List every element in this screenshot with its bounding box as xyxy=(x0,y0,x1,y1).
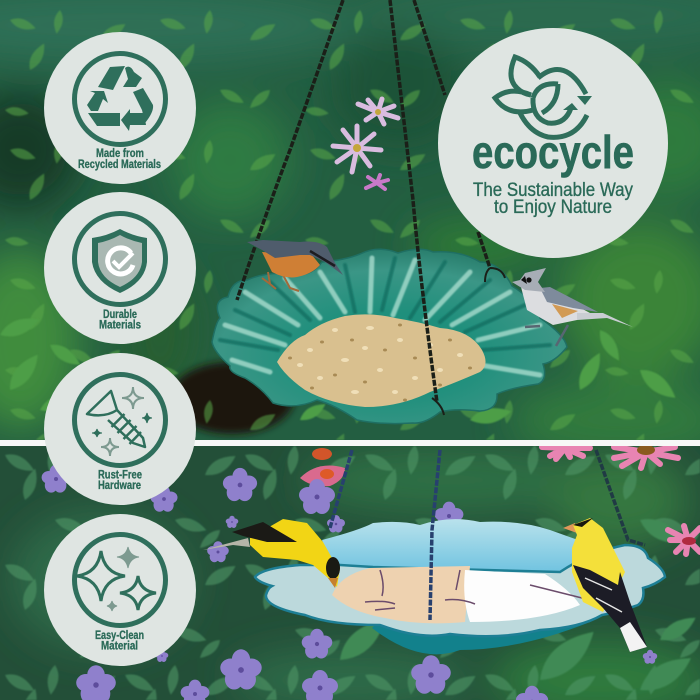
logo wordmark: ecocycle xyxy=(472,126,634,178)
divider band xyxy=(0,440,700,446)
icon: shield with check xyxy=(74,214,166,304)
bird: nuthatch xyxy=(247,240,343,291)
flowers: coneflowers xyxy=(300,445,700,554)
badge: ecocycle brand xyxy=(438,28,668,258)
flowers: daisies xyxy=(333,99,398,189)
bird: goldfinch right xyxy=(563,518,647,652)
icon: recycling symbol xyxy=(74,54,166,144)
badge: durable materials xyxy=(44,192,196,344)
bottom scene: bird bath xyxy=(255,519,665,654)
label xyxy=(78,148,161,171)
icon: screw with sparkles xyxy=(74,374,166,466)
basin underside xyxy=(372,600,590,654)
tagline: The Sustainable Way xyxy=(473,179,633,201)
top chains xyxy=(237,0,505,415)
badge: rust-free hardware xyxy=(44,353,196,505)
basin water: sand reflection xyxy=(332,566,470,623)
birdseed pile xyxy=(277,314,486,407)
basin rim xyxy=(255,545,665,636)
label: Easy-Clean xyxy=(95,630,144,642)
label: Materials xyxy=(99,320,141,332)
bird: goldfinch left xyxy=(203,519,340,588)
flowers: purple geraniums xyxy=(42,465,657,700)
tagline: to Enjoy Nature xyxy=(494,196,612,218)
photo: bottom garden background xyxy=(0,445,700,700)
bird: titmouse xyxy=(512,268,633,346)
basin back wall xyxy=(322,519,590,590)
label: Durable xyxy=(103,309,137,321)
icon: sparkles xyxy=(74,534,166,626)
bottom chains xyxy=(330,450,645,620)
top scene: bird feeder dish xyxy=(212,249,567,424)
label: Made from xyxy=(96,148,144,160)
label xyxy=(98,470,142,492)
photo: top garden background xyxy=(0,0,700,460)
dish ribs xyxy=(220,258,550,375)
badge: easy-clean material xyxy=(44,514,196,666)
label: Rust-Free xyxy=(98,470,142,482)
label: Recycled Materials xyxy=(78,159,161,171)
icon: ecocycle leaf logo xyxy=(495,57,587,137)
label xyxy=(99,309,141,332)
basin water: sky reflection xyxy=(464,570,580,622)
basin water: cracks xyxy=(365,570,590,610)
label xyxy=(95,630,144,652)
dark soil under the dish xyxy=(170,362,294,434)
badge: made from recycled materials xyxy=(44,32,196,184)
label: Material xyxy=(101,640,138,652)
label: Hardware xyxy=(98,480,141,492)
icon: logo arrowheads xyxy=(563,96,592,110)
dish rim xyxy=(212,249,567,424)
tagline xyxy=(473,179,633,218)
